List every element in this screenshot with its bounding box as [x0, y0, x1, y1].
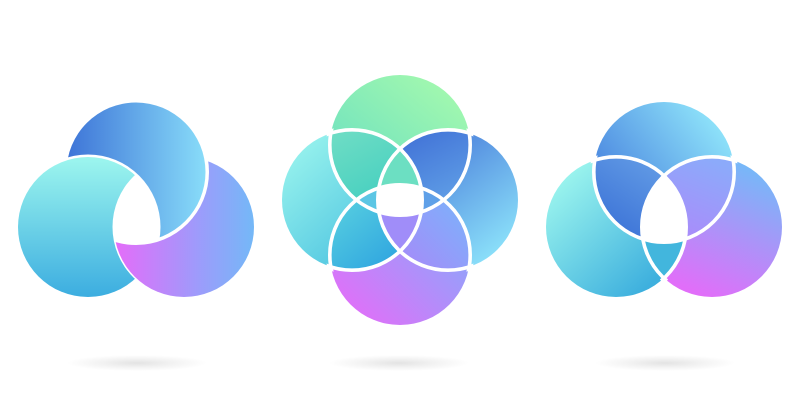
circle: left cyan [282, 130, 422, 270]
overlap: bottom centre petal [390, 214, 419, 238]
diagram: three-circle venn [546, 102, 782, 297]
circle: left cyan [546, 157, 686, 297]
overlap: left and right wedge [645, 242, 683, 276]
white outlines [590, 155, 738, 280]
centre hole [644, 178, 684, 240]
crescent: right purple [114, 157, 254, 297]
diagram: three interlocking crescents [18, 102, 254, 297]
ground shadow: right diagram [595, 355, 735, 371]
overlap: top and right [686, 158, 732, 236]
ground shadow: middle diagram [329, 355, 469, 371]
overlap: top and left [596, 158, 662, 236]
white outlines [326, 128, 474, 272]
overlap: bottom and right [402, 202, 468, 268]
overlap: top and left [332, 132, 398, 198]
ground shadow: left diagram [67, 355, 207, 371]
circle: right purple [642, 157, 782, 297]
crescent: left cyan [18, 157, 135, 297]
crescent: top blue [66, 102, 206, 242]
infographic canvas [18, 75, 782, 368]
circle: right blue [378, 130, 518, 270]
overlap: top centre petal [381, 152, 419, 186]
circle: bottom purple [330, 185, 470, 325]
overlap: bottom and left [332, 202, 398, 268]
centre hole [380, 186, 420, 214]
diagram: four-circle venn [282, 75, 518, 325]
overlap: right centre petal [424, 190, 440, 210]
circle: top green [330, 75, 470, 215]
circle: top blue [594, 102, 734, 242]
overlap: top and right [430, 134, 468, 198]
overlap: left centre petal [360, 191, 376, 209]
